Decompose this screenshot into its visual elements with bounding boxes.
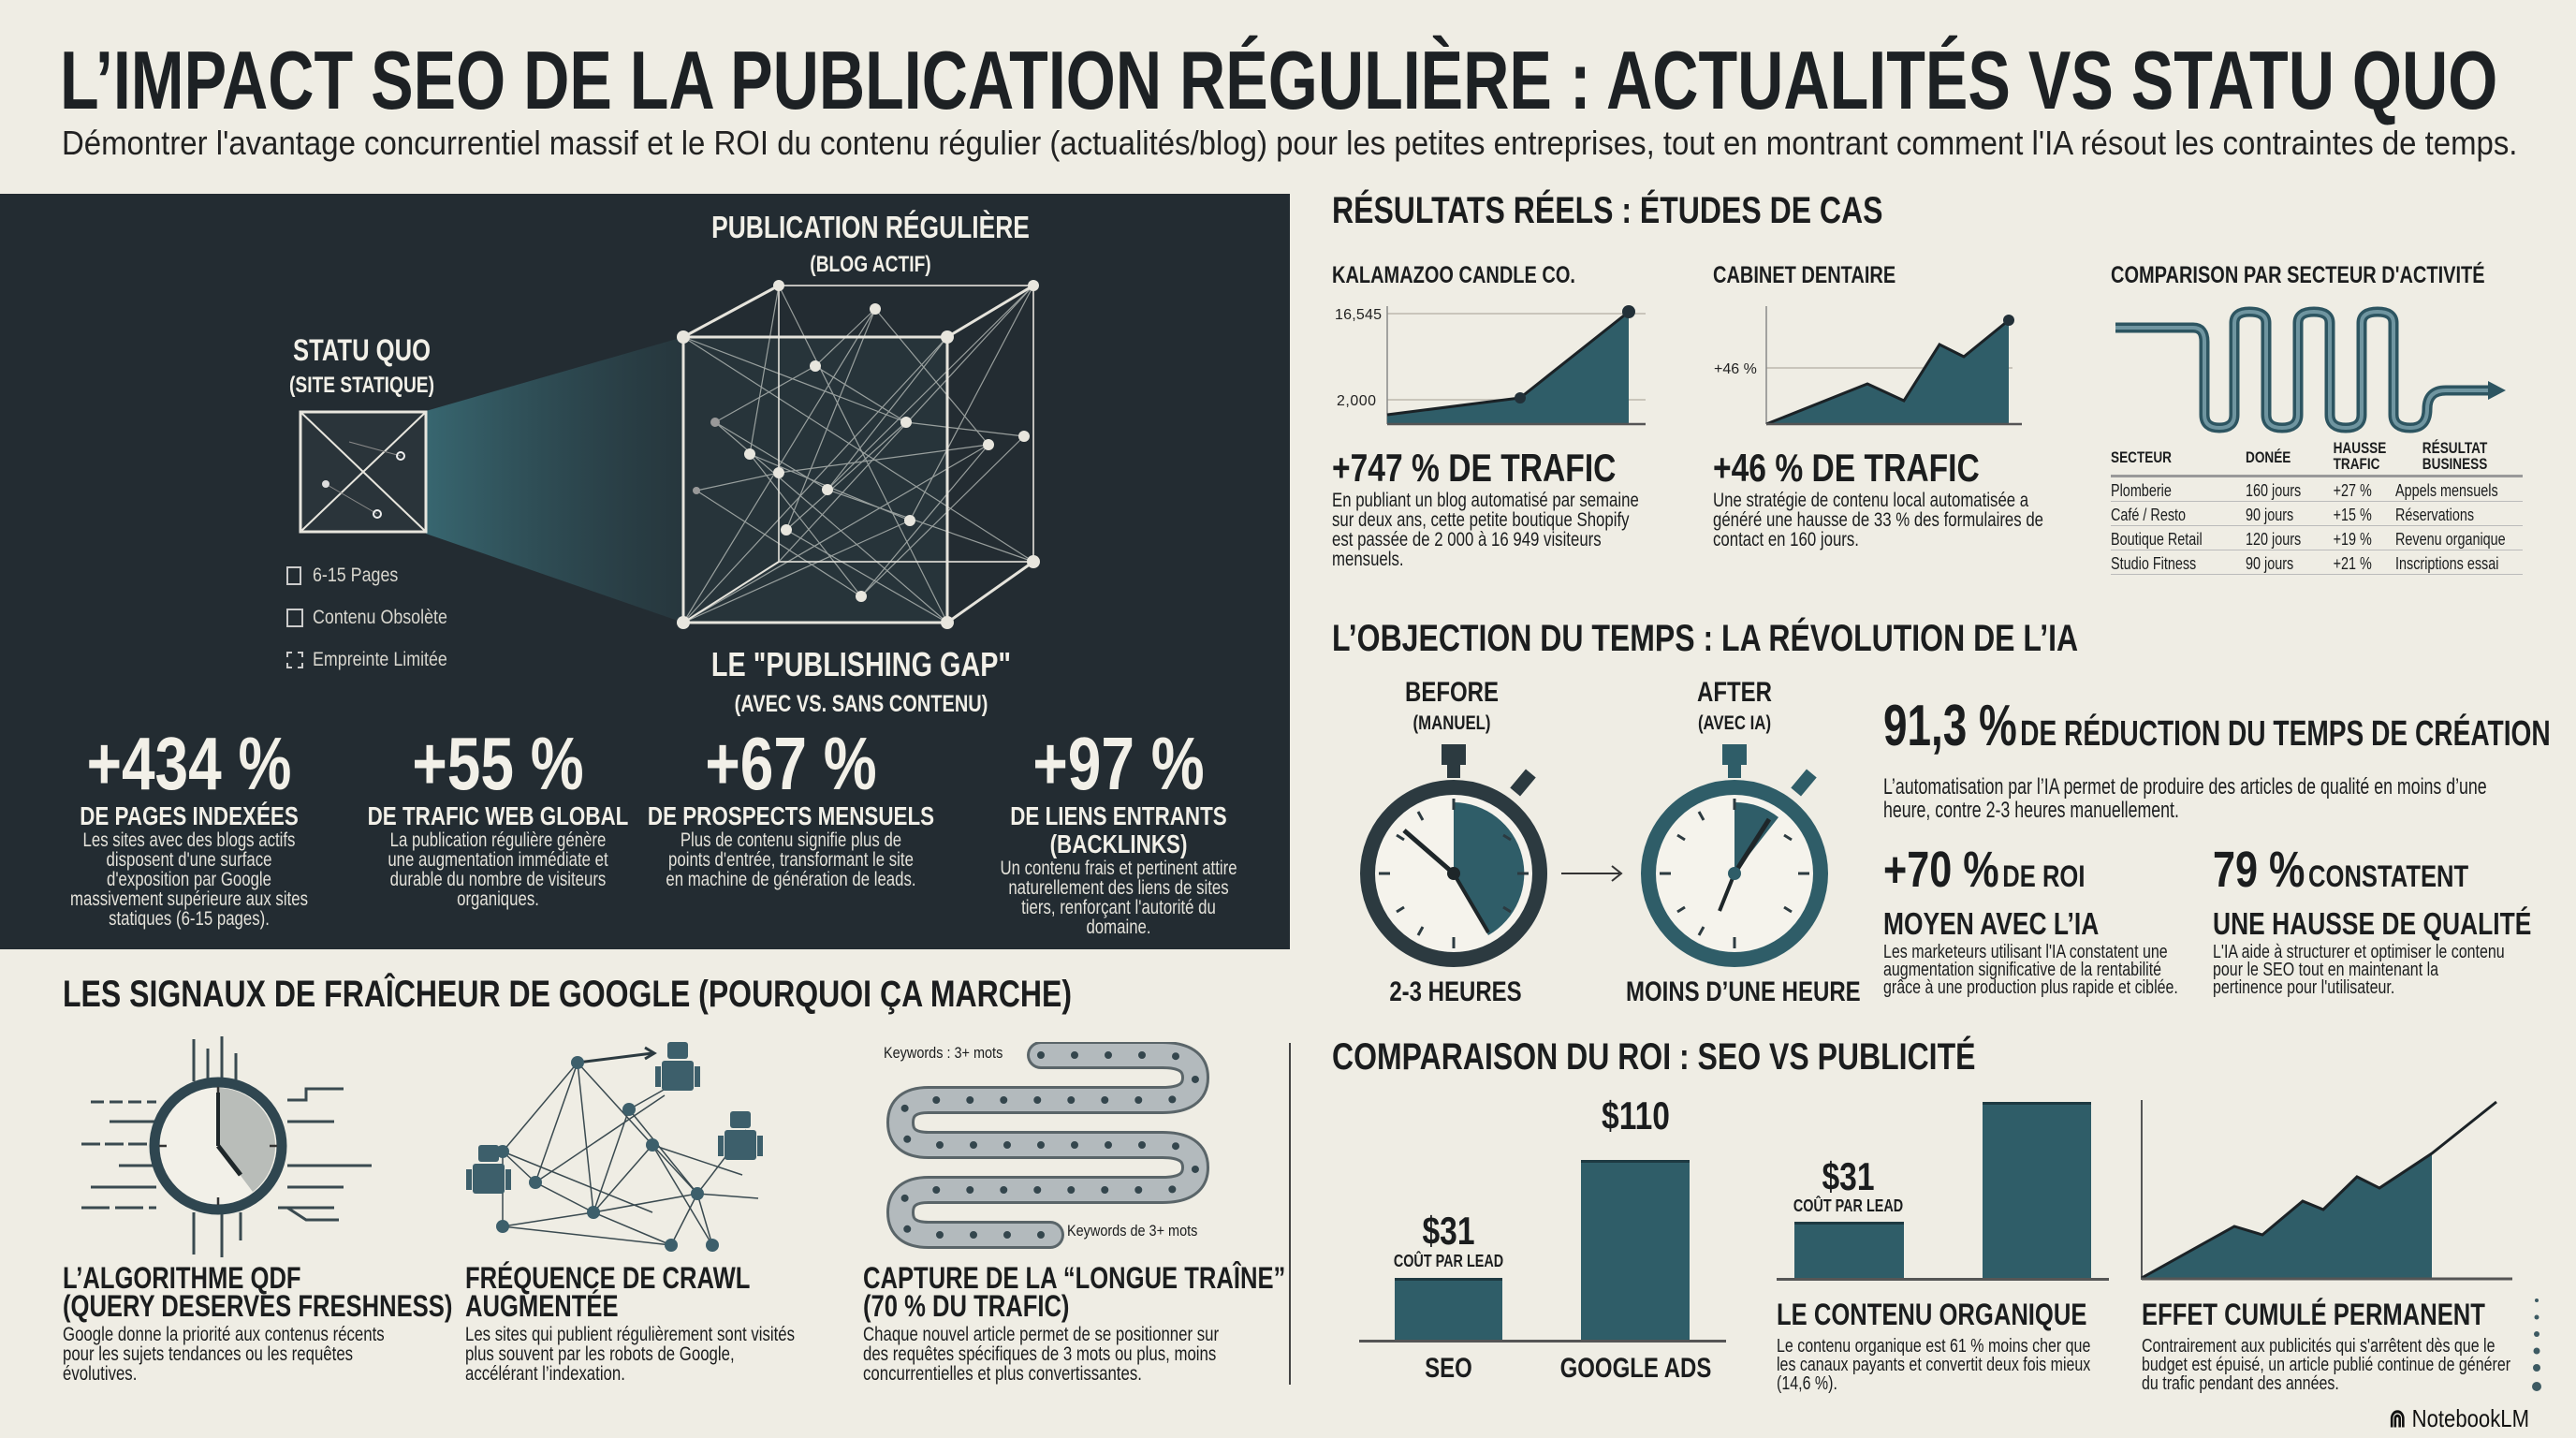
heading: (QUERY DESERVES FRESHNESS) [63, 1289, 452, 1323]
axis labels: SEO [1425, 1353, 1472, 1384]
icon: stopwatch IA [1641, 744, 1828, 967]
stat: 79% qualite: L'IA aide à structurer et optimiser le contenu pour le SEO tout en maintenant la pertinence pour l'utilisateur. [2213, 942, 2505, 998]
table: sectors: BUSINESS [2422, 455, 2487, 473]
table: sectors: +15 % [2334, 506, 2372, 524]
stat: trafic web: +55 % [412, 722, 584, 805]
heading: comparaison du ROI: COMPARAISON DU ROI : SEO VS PUBLICITÉ [1332, 1036, 1975, 1078]
heading: signaux de fraicheur: LES SIGNAUX DE FRAÎCHEUR DE GOOGLE (POURQUOI ÇA MARCHE) [63, 974, 1072, 1015]
value: $31 [1394, 1209, 1503, 1270]
stat: 91,3% reduction: L’automatisation par l’IA permet de produire des articles de qualité en moins d’une heure, contre 2-3 heures manuellement. [1883, 774, 2487, 823]
table: sectors: DONÉE [2246, 448, 2291, 466]
heading: objection du temps: L’OBJECTION DU TEMPS : LA RÉVOLUTION DE L’IA [1332, 618, 2078, 659]
stat: 91,3% reduction [1883, 694, 2551, 823]
stat: 79% qualite: 79 % CONSTATENT [2213, 842, 2468, 898]
chart: kalamazoo traffic [1335, 305, 1646, 425]
chart: kalamazoo traffic: 16,545 [1335, 307, 1382, 323]
stat: +70% ROI: Les marketeurs utilisant l'IA constatent une augmentation significative de la rentabilité grâce à une production plus rapide et ciblée. [1883, 942, 2178, 998]
label: keywords de 3+ mots: Keywords de 3+ mots [1067, 1222, 1197, 1240]
value: $31: $31 [1422, 1209, 1475, 1253]
heading: COMPARISON PAR SECTEUR D'ACTIVITÉ [2111, 262, 2485, 288]
stat: trafic web [368, 722, 628, 910]
heading: publication reguliere: (BLOG ACTIF) [810, 252, 931, 277]
chart: dentaire traffic: +46 % [1714, 361, 1757, 377]
table: sectors: 120 jours [2246, 530, 2301, 549]
item: obsolete content: Contenu Obsolète [313, 607, 447, 628]
table: sectors: Réservations [2395, 506, 2474, 524]
stat: prospects: +67 % [705, 722, 877, 805]
stat: trafic web: DE TRAFIC WEB GLOBAL [368, 801, 628, 830]
stat: 91,3% reduction: 91,3 % DE RÉDUCTION DU TEMPS DE CRÉATION [1883, 694, 2551, 758]
table: sectors: Studio Fitness [2111, 554, 2196, 573]
stat: prospects: DE PROSPECTS MENSUELS [648, 801, 934, 830]
description: Chaque nouvel article permet de se positionner sur des requêtes spécifiques de 3 mots ou plus, moins concurrentielles et plus convertissantes. [863, 1324, 1219, 1385]
case title: KALAMAZOO CANDLE CO. [1332, 262, 1575, 288]
table: sectors: Plomberie [2111, 481, 2172, 500]
list: static site traits [286, 565, 447, 670]
stat: +747%: +747 % DE TRAFIC [1332, 446, 1616, 490]
label: after [1697, 677, 1772, 734]
table: sectors: SECTEUR [2111, 448, 2172, 466]
stat: +70% ROI: +70 % DE ROI [1883, 842, 2085, 898]
case study: cabinet dentaire [1713, 262, 2043, 550]
stat: 79% qualite: UNE HAUSSE DE QUALITÉ [2213, 906, 2531, 941]
value: $31 [1793, 1154, 1903, 1215]
stat: pages indexees: +434 % [87, 722, 291, 805]
subtitle: Démontrer l'avantage concurrentiel massif et le ROI du contenu régulier (actualités/blog) pour les petites entreprises, tout en montrant comment l'IA résout les contraintes de temps. [62, 124, 2517, 162]
panel: crawl frequency [465, 1034, 858, 1386]
panel: comparaison par secteur [2111, 262, 2523, 575]
icon: long tail road [882, 1042, 1219, 1257]
stat: +70% ROI [1883, 842, 2178, 998]
label: after: (AVEC IA) [1698, 712, 1771, 734]
icon: static site square [300, 410, 427, 534]
table: sectors: 160 jours [2246, 481, 2301, 500]
heading: L’ALGORITHME QDF [63, 1261, 301, 1295]
icon: stopwatch manual [1360, 744, 1547, 967]
description: En publiant un blog automatisé par semaine sur deux ans, cette petite boutique Shopify est passée de 2 000 à 16 949 visiteurs mensuels. [1332, 490, 1639, 570]
heading [863, 1264, 1285, 1320]
value: $31: COÛT PAR LEAD [1394, 1252, 1503, 1270]
heading: LE CONTENU ORGANIQUE [1777, 1298, 2086, 1331]
description: Une stratégie de contenu local automatisée a généré une hausse de 33 % des formulaires de contact en 160 jours. [1713, 490, 2043, 550]
heading: EFFET CUMULÉ PERMANENT [2142, 1298, 2485, 1331]
stopwatch comparison [1360, 677, 1861, 1007]
value: $31: $31 [1822, 1154, 1875, 1198]
label: 2-3 heures: 2-3 HEURES [1389, 976, 1522, 1007]
table: sectors: +21 % [2334, 554, 2372, 573]
description: Contrairement aux publicités qui s'arrêtent dès que le budget est épuisé, un article publié continue de générer du trafic pendant des années. [2142, 1336, 2510, 1394]
description: Google donne la priorité aux contenus récents pour les sujets tendances ou les requêtes évolutives. [63, 1324, 385, 1385]
panel: QDF algorithm [63, 1036, 452, 1385]
heading: publishing gap: LE "PUBLISHING GAP" [711, 645, 1011, 683]
description: Le contenu organique est 61 % moins cher que les canaux payants et convertit deux fois mieux (14,6 %). [1777, 1336, 2090, 1394]
stat: +46%: +46 % DE TRAFIC [1713, 446, 1980, 490]
heading: (70 % DU TRAFIC) [863, 1289, 1069, 1323]
table: sectors: TRAFIC [2334, 455, 2379, 473]
stat: liens entrants: +97 % [1032, 722, 1205, 805]
label: after: AFTER [1697, 677, 1772, 708]
chart: contenu organique [1777, 1102, 2109, 1394]
heading: publication reguliere [711, 210, 1030, 277]
heading: statu quo: (SITE STATIQUE) [289, 373, 434, 398]
value: $110: $110 [1602, 1093, 1670, 1137]
heading: FRÉQUENCE DE CRAWL [465, 1261, 750, 1295]
stat: pages indexees: DE PAGES INDEXÉES [80, 801, 299, 830]
table: sectors: +19 % [2334, 530, 2372, 549]
item: limited footprint: Empreinte Limitée [313, 649, 447, 670]
chart: effet cumule [2141, 1100, 2512, 1394]
table: sectors: Appels mensuels [2395, 481, 2498, 500]
panel: long tail [863, 1034, 1284, 1386]
stat: prospects: Plus de contenu signifie plus de points d'entrée, transformant le site en machine de génération de leads. [666, 829, 916, 890]
stat: prospects [648, 722, 934, 890]
title: L’IMPACT SEO DE LA PUBLICATION RÉGULIÈRE : ACTUALITÉS VS STATU QUO [60, 34, 2497, 126]
table: sectors [2111, 439, 2523, 575]
heading [465, 1264, 750, 1320]
icon: speeding clock [81, 1036, 372, 1257]
label: moins d'une heure: MOINS D’UNE HEURE [1626, 976, 1861, 1007]
heading: CAPTURE DE LA “LONGUE TRAÎNE” [863, 1261, 1285, 1295]
stat: +70% ROI: MOYEN AVEC L’IA [1883, 906, 2099, 941]
decorative dots column [2532, 1299, 2541, 1391]
stat: liens entrants: DE LIENS ENTRANTS [1010, 801, 1227, 830]
icon: network cube [677, 280, 1040, 629]
table: sectors: Inscriptions essai [2395, 554, 2498, 573]
heading: publication reguliere: PUBLICATION RÉGULIÈRE [711, 210, 1030, 244]
value: $31: COÛT PAR LEAD [1793, 1196, 1903, 1215]
table: sectors: Revenu organique [2395, 530, 2506, 549]
description: Les sites qui publient régulièrement sont visités plus souvent par les robots de Google, accélérant l’indexation. [465, 1324, 795, 1385]
heading: publishing gap: (AVEC VS. SANS CONTENU) [735, 691, 988, 717]
stat: 79% qualite [2213, 842, 2531, 998]
label: keywords 3+ mots: Keywords : 3+ mots [884, 1044, 1003, 1062]
chart: kalamazoo traffic: 2,000 [1337, 393, 1376, 409]
stat: liens entrants [1000, 722, 1237, 938]
table: sectors: 90 jours [2246, 506, 2293, 524]
stat: liens entrants: Un contenu frais et pertinent attire naturellement des liens de sites tiers, renforçant l'autorité du domaine. [1000, 858, 1237, 938]
heading: statu quo: STATU QUO [293, 333, 431, 367]
logo: NotebookLM: ⋒ NotebookLM [2389, 1404, 2529, 1432]
table: sectors: HAUSSE [2334, 439, 2386, 457]
icon: serpentine arrow [2115, 307, 2506, 433]
heading: AUGMENTÉE [465, 1289, 619, 1323]
table: sectors: +27 % [2334, 481, 2372, 500]
table: sectors: Café / Resto [2111, 506, 2186, 524]
label: before: (MANUEL) [1412, 712, 1491, 734]
arrow [1561, 865, 1623, 882]
chart: cost per lead SEO vs ads [1359, 1093, 1726, 1384]
stat: liens entrants: (BACKLINKS) [1050, 829, 1187, 858]
chart: dentaire traffic [1714, 306, 2022, 425]
panel: publishing gap (dark) [0, 194, 1290, 949]
icon: crawl network with robots [465, 1034, 802, 1255]
table: sectors: 90 jours [2246, 554, 2293, 573]
chart: cost per lead SEO vs ads: GOOGLE ADS [1560, 1353, 1711, 1384]
heading: publishing gap [711, 645, 1011, 717]
stat: pages indexees: Les sites avec des blogs actifs disposent d'une surface d'exposition par Google massivement supérieure aux sites statiques (6-15 pages). [70, 829, 308, 930]
beam from static site to cube [426, 339, 681, 620]
heading: etudes de cas: RÉSULTATS RÉELS : ÉTUDES DE CAS [1332, 190, 1882, 231]
case study: kalamazoo [1332, 262, 1646, 570]
label: before [1405, 677, 1499, 734]
stat: trafic web: La publication régulière génère une augmentation immédiate et durable du nombre de visiteurs organiques. [388, 829, 608, 910]
divider [1289, 1043, 1291, 1385]
item: pages: 6-15 Pages [313, 565, 398, 586]
case title: CABINET DENTAIRE [1713, 262, 1895, 288]
label: before: BEFORE [1405, 677, 1499, 708]
stat: pages indexees [70, 722, 308, 930]
heading: statu quo [289, 333, 434, 398]
heading [63, 1261, 452, 1323]
table: sectors: Boutique Retail [2111, 530, 2203, 549]
table: sectors: RÉSULTAT [2422, 439, 2487, 457]
